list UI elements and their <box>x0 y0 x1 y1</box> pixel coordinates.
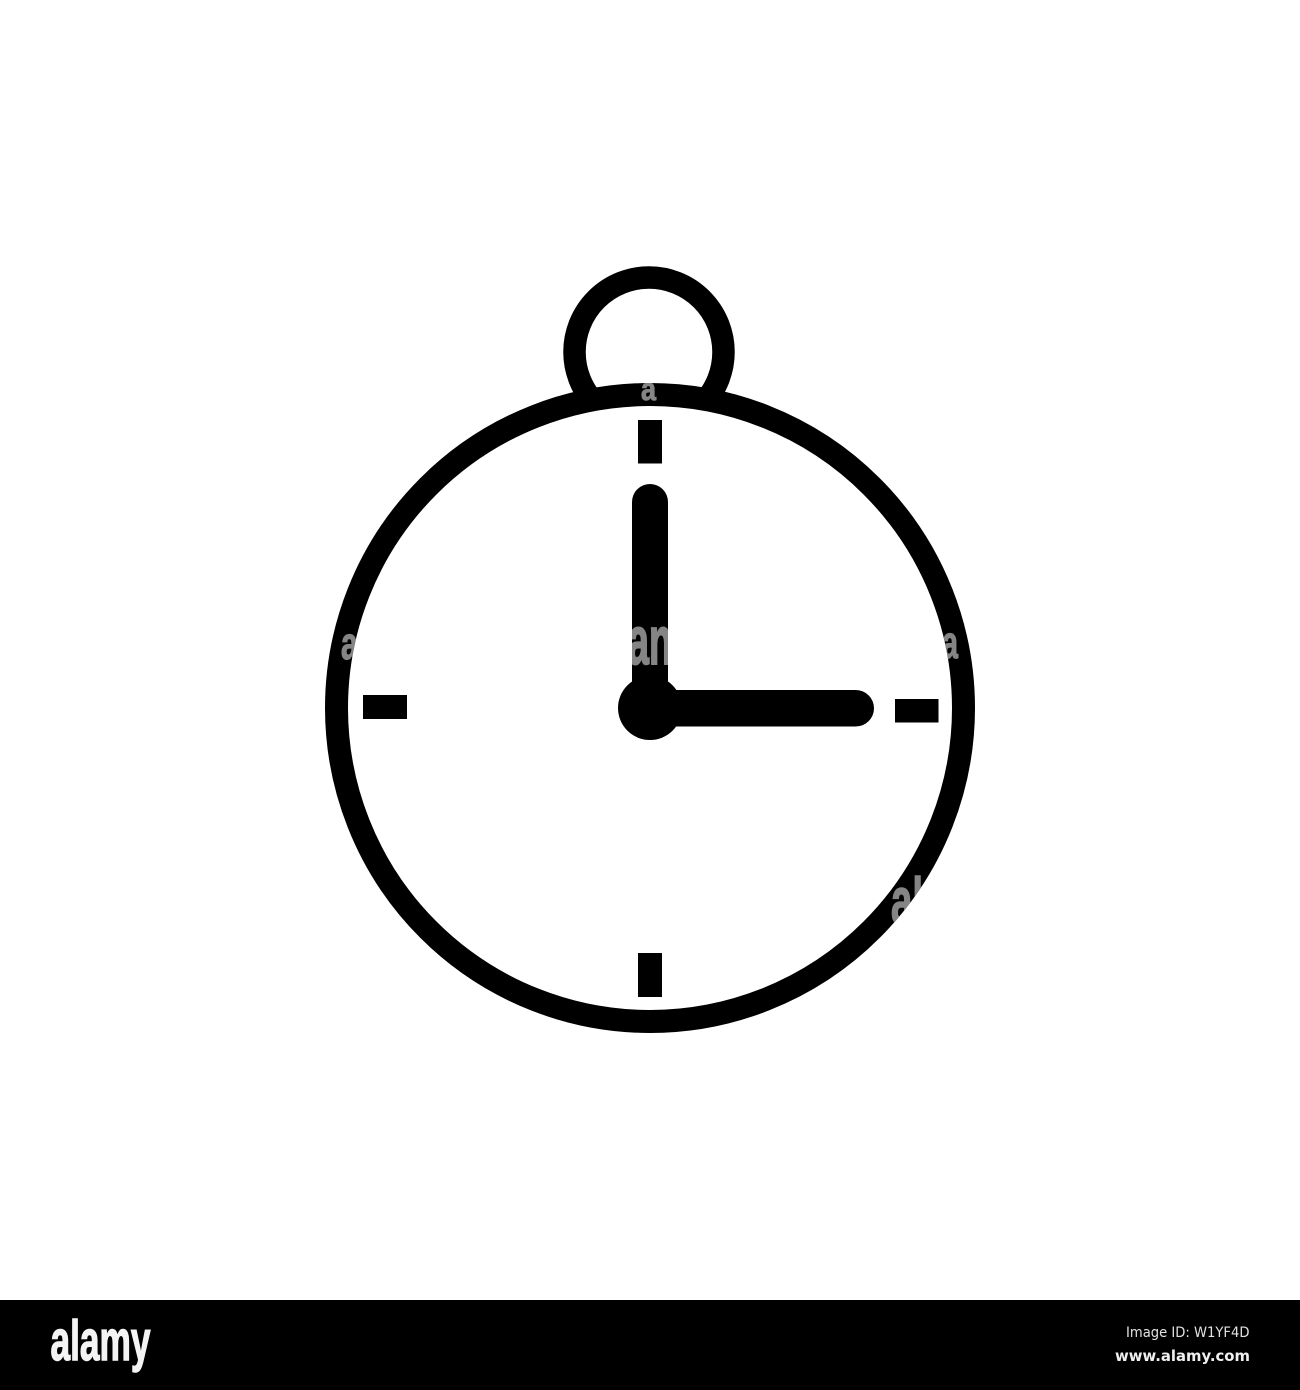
stopwatch top ring <box>574 278 724 426</box>
footer logo: alamy <box>50 1309 151 1373</box>
icon: stopwatch <box>336 278 964 1022</box>
watermark on ring left: a <box>341 618 359 669</box>
watermark on minute hand: an <box>628 603 672 679</box>
watermark fragments <box>341 371 959 937</box>
stopwatch body <box>336 394 964 1022</box>
image id: Image ID: W1YF4D <box>1126 1325 1250 1341</box>
footer bar <box>0 1300 1300 1390</box>
watermark on ring top: a <box>641 371 656 407</box>
website: www.alamy.com <box>1115 1347 1250 1365</box>
watermark on ring lower right: al <box>891 864 923 937</box>
clock hands <box>618 484 874 740</box>
watermark on ring right: a <box>942 617 959 668</box>
hour tick marks <box>363 420 938 997</box>
